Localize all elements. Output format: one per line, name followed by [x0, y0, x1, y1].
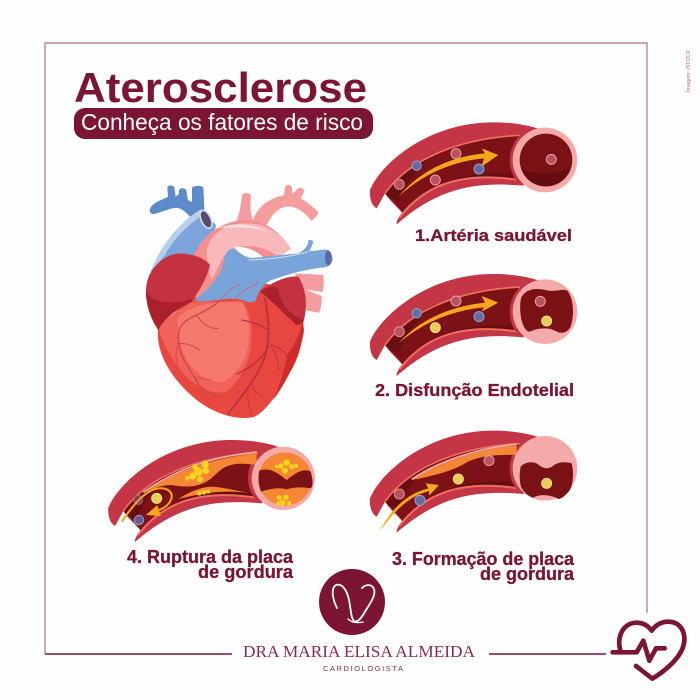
specialty: CARDIOLOGISTA [323, 664, 403, 673]
logo [319, 569, 385, 635]
arrow [122, 488, 172, 522]
label: artery 4: 4. Ruptura da placa [127, 547, 294, 567]
vessel cross-section [513, 279, 577, 344]
vessel cross-section [252, 447, 315, 510]
blood cells [394, 456, 494, 505]
image credit: Imagem: iSTOCK [686, 49, 692, 92]
arrow [398, 296, 498, 343]
label: artery 1: 1.Artéria saudável [415, 226, 572, 245]
panel: artery 3 [370, 431, 577, 533]
blood cells [394, 149, 484, 189]
label: artery 4 [127, 547, 294, 582]
vessel cross-section [513, 436, 577, 501]
label: artery 3: de gordura [480, 564, 575, 584]
icon: heartbeat [613, 622, 684, 679]
panel: artery 2 [370, 274, 577, 376]
icon: heart anatomy [146, 185, 333, 418]
subtitle pill: Conheça os fatores de risco [81, 109, 363, 135]
label: artery 2: 2. Disfunção Endotelial [375, 380, 574, 400]
panel: artery 4 [108, 440, 315, 542]
label: artery 3 [392, 549, 575, 584]
title: Aterosclerose [74, 64, 367, 111]
vessel cross-section [513, 128, 577, 192]
plaque [412, 445, 517, 480]
doctor name: DRA MARIA ELISA ALMEIDA [243, 642, 475, 661]
label: artery 3: 3. Formação de placa [392, 549, 575, 569]
blood cells [134, 493, 162, 525]
plaque [143, 453, 257, 493]
fat deposits [185, 461, 210, 496]
frame border [45, 43, 647, 654]
arrow [398, 148, 498, 197]
blood cells [394, 296, 484, 337]
label: artery 4: de gordura [198, 562, 294, 582]
panel: artery 1 [370, 122, 577, 224]
arrow [379, 483, 439, 532]
